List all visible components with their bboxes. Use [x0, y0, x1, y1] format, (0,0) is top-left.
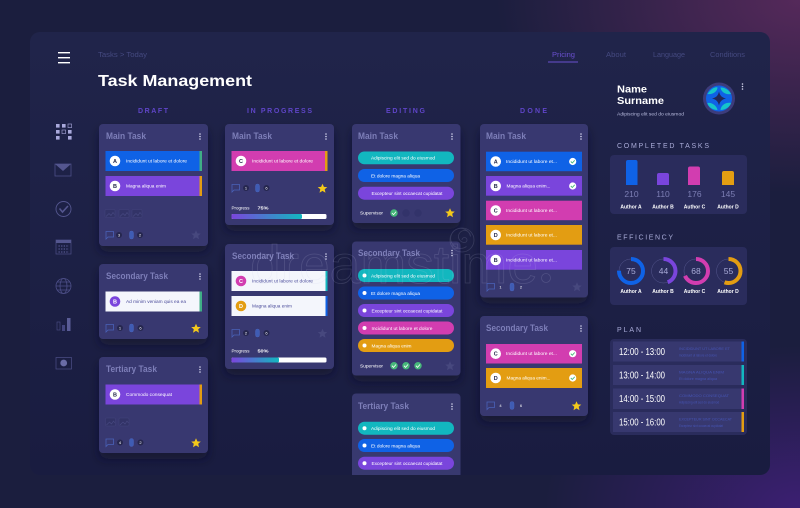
plan row 2: MAGNA ALIQUA ENIM [679, 370, 724, 374]
card: editing tertiary task: Excepteur sint occaecat cupidatat [372, 461, 443, 466]
column headings: DRAFT [138, 108, 169, 115]
card: in progress main task [225, 124, 334, 225]
card: in progress secondary task: C [239, 279, 243, 285]
card: in progress secondary task: Magna aliqua enim [252, 304, 292, 308]
icon: check [56, 202, 71, 216]
card: draft main task: B [113, 184, 117, 190]
card: done secondary task: D [494, 376, 498, 382]
card: draft secondary task [99, 264, 208, 339]
card: done main task: B [494, 184, 498, 190]
card: draft secondary task: Secondary Task [106, 271, 169, 282]
card: draft tertiary task [99, 357, 208, 453]
profile: Surname [617, 95, 664, 107]
plan row 2 [613, 365, 744, 385]
card: in progress secondary task: 6 [265, 330, 268, 336]
card: done main task: Incididunt ut labore et... [506, 257, 557, 262]
menu icon [58, 52, 70, 63]
plan row 1: Incididunt ut labore et dolore [679, 352, 718, 358]
card: in progress main task: Incididunt ut labore et dolore [252, 158, 313, 164]
card: done main task: D [494, 233, 498, 239]
card: in progress secondary task: Incididunt ut labore et dolore [252, 278, 313, 284]
card: done main task: Incididunt ut labore et... [506, 232, 557, 237]
profile: Name [617, 84, 647, 96]
card: draft tertiary task: Tertiary Task [106, 364, 158, 375]
card: in progress secondary task: 2 [245, 330, 248, 336]
card: in progress main task: C [239, 159, 243, 165]
donut: author D: 55 [724, 266, 733, 276]
completed tasks heading: COMPLETED TASKS [617, 143, 709, 150]
card: done main task: 1 [499, 284, 502, 290]
card: done secondary task: 6 [520, 403, 523, 408]
card: done secondary task: Incididunt ut labore et... [506, 351, 557, 356]
plan row 2: Et dolore magna aliqua [679, 376, 718, 381]
card: draft tertiary task: B [113, 392, 117, 398]
top navigation: About [606, 52, 626, 59]
profile: Adipiscing elit sed do eiusmod [617, 112, 684, 118]
card: in progress main task: 1 [245, 186, 248, 190]
panel: efficiency donuts [610, 247, 747, 305]
breadcrumb: Tasks > Today [98, 52, 148, 59]
plan row 3: COMMODO CONSEQUAT [679, 393, 730, 398]
icon: globe [56, 278, 71, 294]
card: draft secondary task: 6 [139, 326, 142, 330]
card: editing secondary task: Magna aliqua enim [372, 343, 412, 348]
panel: completed tasks chart: 210 [624, 189, 639, 199]
plan row 1 [613, 342, 744, 362]
donut: author B: 44 [659, 266, 668, 276]
plan row 3: Adipiscing elit sed do eiusmod [679, 400, 719, 404]
card: done main task: Magna aliqua enim... [506, 183, 550, 188]
card: in progress secondary task: D [239, 304, 243, 310]
card: in progress secondary task: 50% [258, 348, 269, 354]
card: editing secondary task: Incididunt ut labore et dolore [372, 326, 433, 331]
card: editing secondary task: Adipiscing elit sed do eiusmod [371, 273, 435, 278]
panel: completed tasks chart: 145 [721, 189, 735, 199]
plan row 2: 13:00 - 14:00 [619, 370, 665, 382]
card: editing tertiary task [352, 394, 460, 475]
panel: completed tasks chart: Author A [620, 204, 642, 210]
plan row 4: 15:00 - 16:00 [619, 418, 665, 428]
card: editing tertiary task: Et dolore magna aliqua [371, 443, 420, 448]
card: in progress secondary task [225, 244, 334, 369]
plan row 1: 12:00 - 13:00 [619, 347, 665, 358]
card: draft main task: 2 [139, 232, 142, 238]
card: editing main task: Main Task [358, 131, 399, 142]
card: editing main task: Et dolore magna aliqua [371, 173, 420, 178]
card: done secondary task: C [494, 352, 498, 358]
efficiency heading: EFFICIENCY [617, 234, 673, 242]
card: in progress main task: 75% [258, 206, 269, 210]
card: done main task: 2 [520, 284, 523, 290]
card: editing secondary task: Secondary Task [358, 248, 421, 259]
icon: avatar [703, 82, 735, 114]
card: done main task [480, 124, 588, 298]
panel: efficiency donuts: Author A [620, 289, 642, 295]
card: in progress main task: 6 [265, 186, 268, 190]
card: done main task: A [494, 160, 498, 166]
plan row 4 [613, 412, 744, 432]
column headings: IN PROGRESS [247, 108, 312, 115]
card: draft main task: Main Task [106, 131, 147, 142]
title: Task Management [98, 73, 253, 90]
card: draft main task: Incididunt ut labore et dolore [126, 158, 187, 164]
column headings: EDITING [386, 108, 426, 115]
watermark: dreamstime [250, 235, 538, 295]
card: done main task: C [494, 208, 498, 214]
card: done main task: Incididunt ut labore et... [506, 208, 557, 213]
sidebar icons [55, 124, 72, 369]
panel: completed tasks chart: Author D [717, 204, 739, 210]
plan row 3 [613, 388, 744, 409]
top navigation: Conditions [710, 52, 746, 59]
panel: completed tasks chart: 110 [656, 189, 670, 199]
card: editing main task: Excepteur sint occaecat cupidatat [372, 191, 443, 196]
card: draft tertiary task: 2 [139, 440, 142, 445]
panel: completed tasks chart [610, 155, 747, 214]
card: draft secondary task: Ad minim veniam quis ea ea [126, 299, 186, 304]
card: draft secondary task: 1 [119, 326, 122, 330]
card: in progress main task: Progress [232, 206, 250, 210]
card: done main task: Incididunt ut labore et... [506, 159, 557, 164]
plan row 4: Excepteur sint occaecat cupidatat [679, 423, 724, 428]
card: editing secondary task: Supervisor [360, 364, 383, 370]
card: draft main task: Magna aliqua enim [126, 184, 166, 188]
card: editing main task: Adipiscing elit sed do eiusmod [371, 156, 435, 160]
card: draft secondary task: B [113, 300, 117, 306]
card: in progress main task: Main Task [232, 131, 273, 142]
card: draft tertiary task: 4 [119, 440, 122, 445]
plan row 3: 14:00 - 15:00 [619, 394, 665, 405]
card: done secondary task: 4 [499, 403, 502, 408]
card: draft main task [99, 124, 208, 246]
card: editing secondary task: Et dolore magna aliqua [371, 291, 420, 296]
donut: author C: 68 [691, 266, 701, 276]
profile [617, 82, 743, 118]
top navigation: Language [653, 52, 685, 59]
panel: completed tasks chart: Author B [652, 204, 674, 210]
panel: completed tasks chart: Author C [684, 204, 706, 210]
icon: bar chart [57, 318, 70, 331]
panel: plan schedule [610, 339, 747, 435]
card: done main task: Main Task [486, 131, 527, 142]
card: editing main task [352, 124, 460, 223]
column headings: DONE [520, 108, 547, 115]
card: done secondary task: Magna aliqua enim... [506, 375, 550, 380]
card: editing tertiary task: Adipiscing elit sed do eiusmod [371, 426, 435, 431]
column headings [138, 108, 547, 115]
plan row 1: INCIDIDUNT UT LABORE ET [679, 346, 731, 351]
card: in progress secondary task: Progress [232, 348, 250, 354]
card: done main task: B [494, 258, 498, 264]
card: draft tertiary task: Commodo consequat [126, 392, 173, 397]
panel: efficiency donuts: Author B [652, 289, 674, 295]
card: done secondary task: Secondary Task [486, 323, 549, 334]
panel: completed tasks chart: 176 [687, 189, 702, 199]
top navigation: Pricing [552, 52, 575, 59]
card: editing main task: Supervisor [360, 211, 383, 217]
card: editing secondary task [352, 242, 460, 376]
panel: efficiency donuts: Author C [684, 289, 706, 295]
icon: calendar [56, 240, 71, 254]
icon: mail [55, 164, 71, 176]
icon: grid [56, 124, 72, 140]
card: in progress secondary task: Secondary Task [232, 251, 295, 262]
plan row 4: EXCEPTEUR SINT OCCAECAT [679, 416, 733, 422]
card: draft main task: 3 [118, 232, 121, 238]
card: draft main task: A [113, 159, 117, 165]
plan heading: PLAN [617, 327, 641, 334]
donut: author A: 75 [626, 266, 636, 276]
card: editing tertiary task: Tertiary Task [358, 401, 410, 412]
card: editing secondary task: Excepteur sint occaecat cupidatat [372, 308, 443, 313]
panel: efficiency donuts: Author D [717, 289, 739, 295]
icon: photo [56, 358, 72, 369]
card: done secondary task [480, 316, 588, 416]
top navigation [548, 52, 746, 62]
